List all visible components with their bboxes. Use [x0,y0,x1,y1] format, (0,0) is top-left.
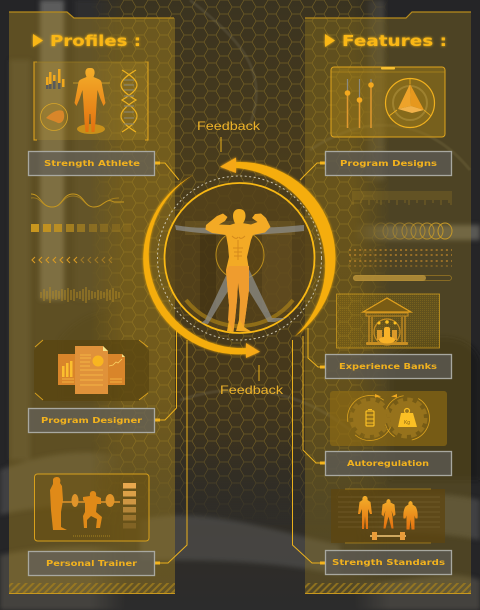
panel: profiles [9,12,175,594]
icon: experience bank [336,294,440,348]
label: experience banks [326,354,452,378]
vitruvian figure [175,225,304,324]
overlapping rings [374,223,452,239]
icon: autoregulation gears [330,387,447,449]
label: personal trainer [28,552,154,576]
panel: features [305,12,471,594]
label: strength athlete [28,152,154,176]
progress bar [353,275,452,281]
feedback arrow: clockwise [220,158,335,337]
label: program designs [326,152,452,176]
icon: autoregulation gears: Kg [404,420,410,426]
icon: personal trainer [34,474,149,541]
label: program designs: Program Designs [340,159,437,168]
heading: profiles [33,32,141,50]
label: strength standards [326,550,452,574]
connector lines [155,162,325,564]
inner disc [158,176,322,340]
label: program designer [28,408,154,432]
pixel squares [31,224,131,232]
icon: program documents [34,340,149,401]
label: strength athlete: Strength Athlete [44,159,141,168]
feedback arrow: counter-clockwise [143,174,260,358]
label: program designer: Program Designer [41,416,142,425]
muscular figure [206,209,270,332]
dot matrix [349,250,452,266]
heading: features: Features : [342,32,447,50]
feedback label top: Feedback [197,119,261,133]
ruler ticks [353,191,451,205]
heading: profiles: Profiles : [50,32,141,50]
icon: athlete profile [34,62,148,140]
feedback label top [197,119,261,152]
icon: program design dashboard [331,67,445,137]
label: autoregulation: Autoregulation [347,459,429,468]
chevrons [32,257,112,263]
feedback label bottom: Feedback [220,383,284,397]
label: personal trainer: Personal Trainer [46,559,137,568]
icon: strength standards [331,489,445,543]
feedback label bottom [220,365,284,397]
central diagram [143,119,335,397]
label: autoregulation [326,452,452,476]
label: experience banks: Experience Banks [339,362,437,371]
label: strength standards: Strength Standards [332,558,445,567]
audio bars [41,287,119,303]
waves [31,194,124,207]
